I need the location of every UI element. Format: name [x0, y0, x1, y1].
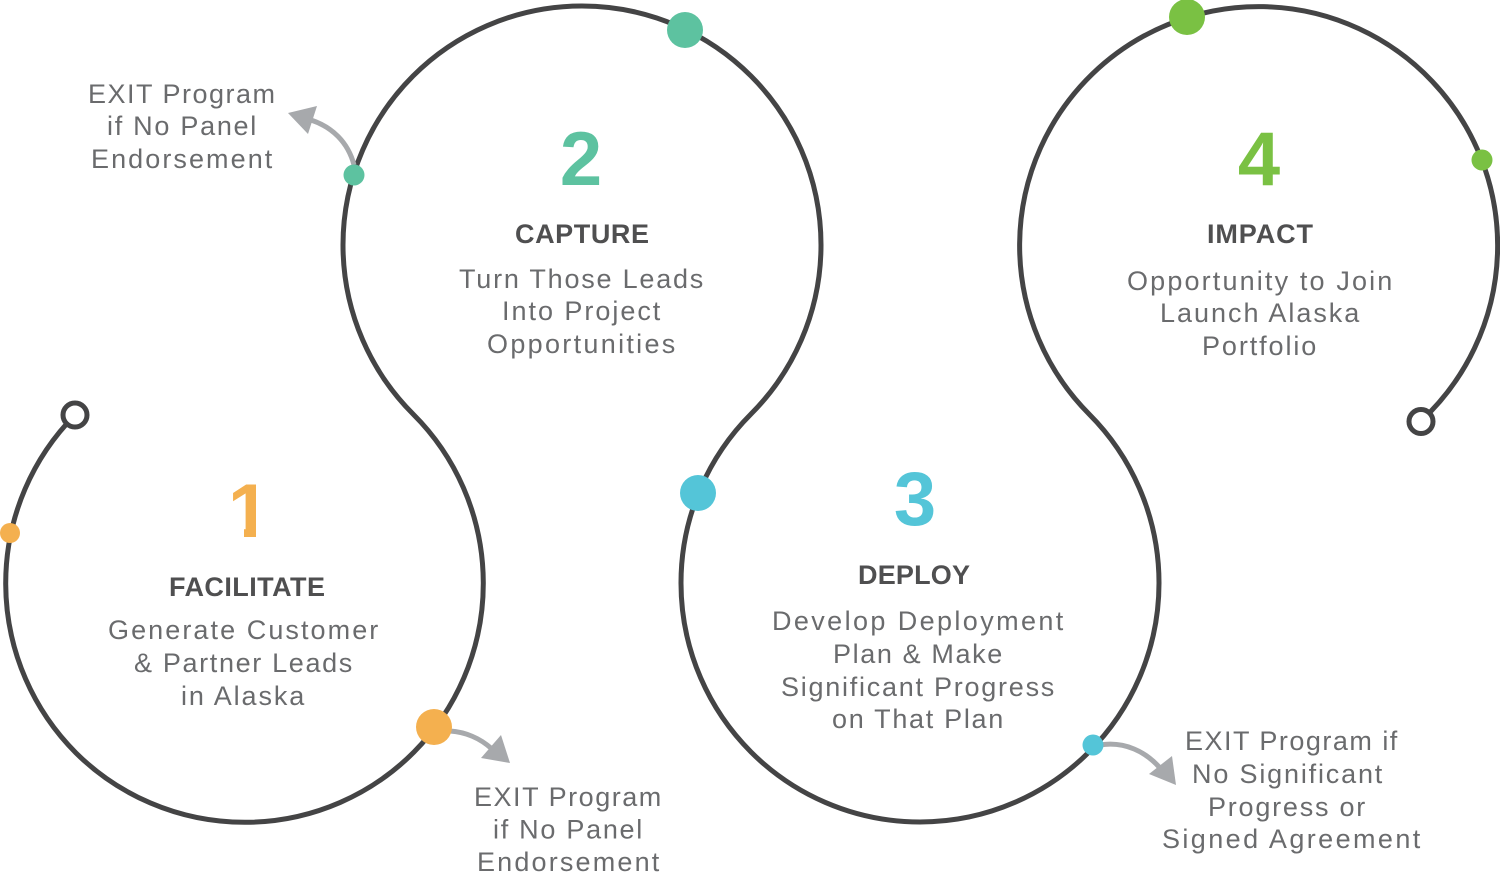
description: step 4: Portfolio — [1202, 331, 1316, 361]
panel: step 1 facilitate — [0, 403, 661, 872]
description: step 1: Generate Customer — [108, 615, 378, 645]
panel: step 3 deploy — [680, 457, 1421, 854]
exit note: step 3 — [1162, 726, 1421, 854]
number 4: 4 — [1238, 117, 1280, 202]
exit note: step 2: if No Panel — [107, 111, 256, 141]
exit note: step 3: No Significant — [1192, 759, 1383, 789]
exit note: step 2 — [88, 79, 275, 174]
description: step 3: Develop Deployment — [772, 606, 1064, 636]
description: step 4: Launch Alaska — [1160, 298, 1360, 328]
exit note: step 1 — [474, 782, 661, 872]
description: step 4 — [1127, 266, 1392, 361]
description: step 3: Significant Progress — [781, 672, 1054, 702]
large green dot — [667, 12, 703, 48]
heading: impact: IMPACT — [1207, 219, 1314, 249]
exit note: step 2: Endorsement — [91, 144, 273, 174]
small orange dot — [0, 523, 20, 543]
small green dot — [344, 164, 364, 186]
description: step 3 — [772, 606, 1064, 734]
number 3: 3 — [894, 457, 936, 542]
number 2: 2 — [560, 117, 602, 202]
exit note: step 3: Progress or — [1208, 792, 1365, 822]
heading: facilitate: FACILITATE — [169, 572, 325, 602]
large orange dot — [416, 709, 452, 745]
exit arrow: step 1 — [450, 731, 510, 763]
description: step 4: Opportunity to Join — [1127, 266, 1392, 296]
icon: end ring — [1409, 410, 1433, 434]
description: step 2 — [459, 264, 703, 359]
description: step 3: Plan & Make — [833, 639, 1002, 669]
description: step 2: Opportunities — [487, 329, 675, 359]
large lime dot — [1169, 0, 1205, 35]
description: step 1 — [108, 615, 378, 711]
description: step 1: in Alaska — [181, 681, 305, 711]
exit note: step 1: EXIT Program — [474, 782, 661, 812]
exit note: step 3: Signed Agreement — [1162, 824, 1421, 854]
description: step 2: Into Project — [502, 296, 661, 326]
panel: step 4 impact — [1127, 0, 1492, 434]
exit note: step 2: EXIT Program — [88, 79, 275, 109]
icon: start ring — [63, 403, 87, 427]
description: step 1: & Partner Leads — [134, 648, 352, 678]
panel: step 2 capture — [88, 12, 703, 359]
description: step 3: on That Plan — [832, 704, 1003, 734]
description: step 2: Turn Those Leads — [459, 264, 703, 294]
exit note: step 1: if No Panel — [493, 814, 642, 844]
exit note: step 3: EXIT Program if — [1185, 726, 1398, 756]
exit arrow: step 2 — [288, 106, 354, 165]
large blue dot — [680, 475, 716, 511]
small lime dot — [1472, 150, 1492, 170]
number 1: 1 — [228, 469, 270, 554]
exit arrow: step 3 — [1100, 744, 1176, 785]
heading: capture: CAPTURE — [515, 219, 649, 249]
small blue dot — [1082, 734, 1104, 756]
heading: deploy: DEPLOY — [858, 560, 970, 590]
